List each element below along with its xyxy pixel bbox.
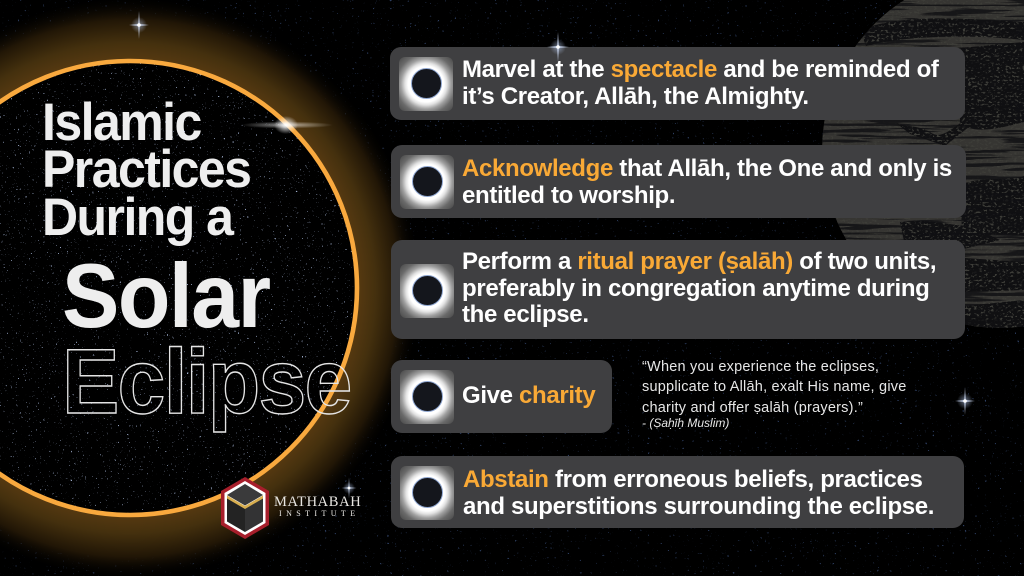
star top left bbox=[129, 11, 149, 39]
title: Solar: Solar bbox=[62, 245, 270, 347]
star right bbox=[955, 387, 975, 415]
logo wordmark: MATHABAH bbox=[274, 494, 361, 510]
text: marvel bbox=[462, 56, 939, 110]
text: marvel: it’s Creator, Allāh, the Almighty. bbox=[462, 82, 809, 110]
text: marvel: Marvel at the spectacle and be reminded of bbox=[462, 56, 939, 83]
text: prayer: preferably in congregation anytime during bbox=[462, 274, 929, 302]
text: acknowledge: Acknowledge that Allāh, the One and only is bbox=[462, 155, 952, 182]
flare on the ring bbox=[241, 116, 333, 134]
text: prayer: the eclipse. bbox=[462, 301, 589, 328]
title: Islamic: Islamic bbox=[42, 93, 201, 152]
text: abstain bbox=[463, 466, 934, 520]
logo wordmark bbox=[274, 494, 361, 518]
logo hexagon mark bbox=[221, 477, 269, 539]
text: abstain: Abstain from erroneous beliefs, practices bbox=[463, 466, 923, 493]
panel: marvel bbox=[390, 47, 965, 120]
text: abstain: and superstitions surrounding the eclipse. bbox=[463, 492, 934, 520]
icon: eclipse bbox=[400, 370, 454, 424]
text: prayer: Perform a ritual prayer (ṣalāh) of two units, bbox=[462, 248, 936, 275]
text: charity: Give charity bbox=[462, 382, 595, 409]
hadith quote: charity and offer ṣalāh (prayers).” bbox=[642, 400, 863, 416]
title: Practices: Practices bbox=[42, 140, 250, 199]
panel: acknowledge bbox=[391, 145, 966, 218]
panel: charity bbox=[391, 360, 612, 433]
title: During a: During a bbox=[42, 188, 232, 247]
planet bbox=[820, 0, 1024, 340]
panel: abstain bbox=[391, 456, 964, 528]
hadith quote: supplicate to Allāh, exalt His name, give bbox=[642, 379, 907, 395]
hadith quote: - (Ṣaḥīḥ Muslim) bbox=[642, 416, 729, 430]
star above first card bbox=[547, 32, 569, 62]
hadith quote bbox=[642, 359, 907, 430]
eclipse glow bbox=[0, 0, 422, 576]
hadith quote: “When you experience the eclipses, bbox=[642, 359, 879, 375]
star near logo bbox=[342, 478, 356, 498]
text: acknowledge: entitled to worship. bbox=[462, 182, 675, 208]
panel: prayer bbox=[391, 240, 965, 339]
icon: eclipse bbox=[400, 155, 454, 209]
logo wordmark: INSTITUTE bbox=[279, 509, 359, 518]
icon: eclipse bbox=[400, 264, 454, 318]
eclipse disc with stars bbox=[0, 50, 370, 530]
text: acknowledge bbox=[462, 155, 952, 208]
text: prayer bbox=[462, 248, 936, 328]
icon: eclipse bbox=[400, 466, 454, 520]
icon: eclipse bbox=[399, 57, 453, 111]
